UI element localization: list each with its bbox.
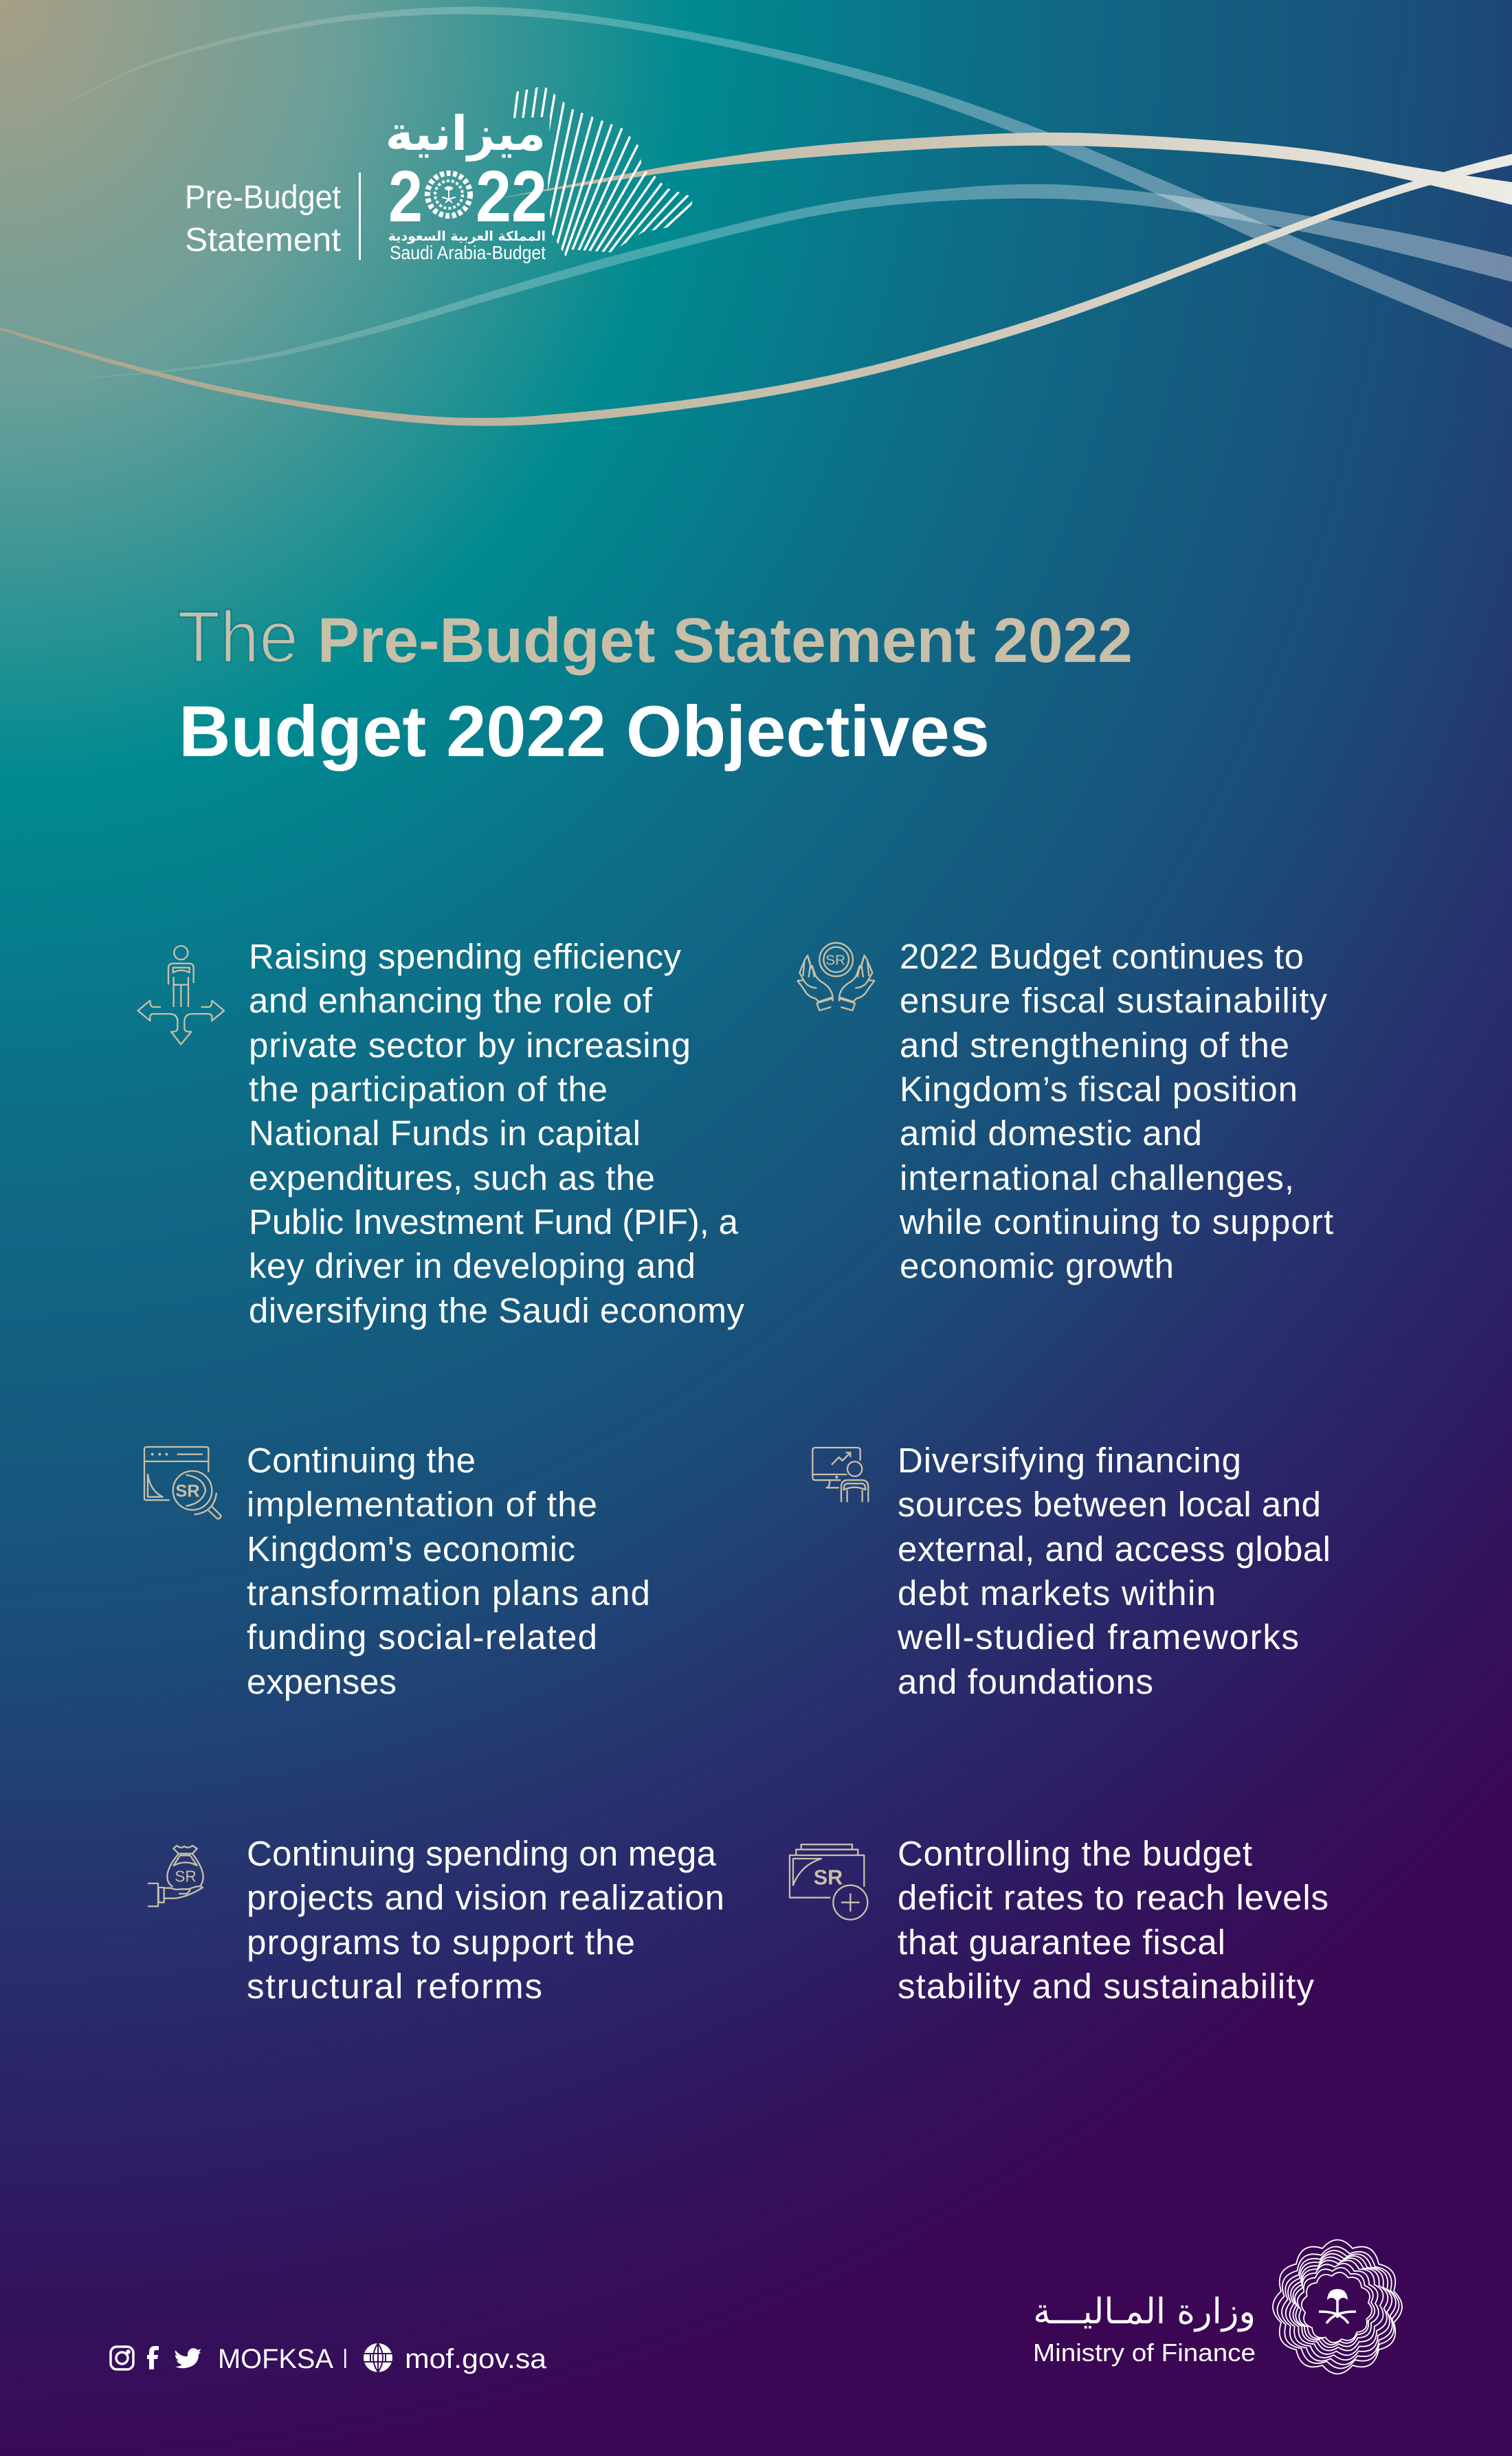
- text: fiscal sustainability: and strengthening of the: [900, 1026, 1289, 1065]
- text: mega projects: structural reforms: [247, 1967, 542, 2006]
- logo: pre-budget statement lockup: 22: [476, 156, 547, 237]
- text: raising spending efficiency: expenditures, such as the: [249, 1158, 655, 1197]
- decorative ribbons: [0, 7, 1512, 426]
- logo: pre-budget statement lockup: [186, 87, 693, 263]
- objective 6: [790, 1834, 1328, 2006]
- icon: hands holding SR coin: SR: [825, 952, 845, 968]
- divider: [359, 173, 361, 260]
- text: diversifying financing: Diversifying financing: [898, 1441, 1241, 1480]
- text: fiscal sustainability: Kingdom’s fiscal position: [900, 1070, 1298, 1109]
- text: mega projects: Continuing spending on mega: [247, 1834, 717, 1873]
- heading line 1: Pre-Budget Statement 2022: [318, 606, 1133, 676]
- icon: facebook: [147, 2346, 159, 2369]
- ribbon: translucent middle wave: [53, 184, 1512, 380]
- text: budget deficit: deficit rates to reach levels: [898, 1878, 1328, 1917]
- text: raising spending efficiency: Public Investment Fund (PIF), a: [249, 1202, 739, 1241]
- icon: hands holding SR coin: [797, 943, 875, 1010]
- text: diversifying financing: external, and access global: [898, 1529, 1331, 1569]
- Arabic wordmark: ميزانية: [386, 107, 546, 162]
- icon: instagram: [111, 2347, 133, 2369]
- English ministry name: Ministry of Finance: [1033, 2338, 1256, 2367]
- objective 2: [797, 937, 1333, 1285]
- text: fiscal sustainability: while continuing to support: [899, 1202, 1333, 1241]
- text: diversifying financing: debt markets within: [898, 1573, 1216, 1613]
- text: transformation plans: Continuing the: [247, 1441, 476, 1480]
- text: mega projects: programs to support the: [247, 1923, 635, 1962]
- icon: banknotes with plus: [790, 1844, 867, 1920]
- label: Pre-Budget Statement: Statement: [185, 222, 341, 258]
- label: Pre-Budget Statement: Pre-Budget: [185, 179, 341, 216]
- text: transformation plans: implementation of the: [247, 1485, 597, 1524]
- text: transformation plans: Kingdom's economic: [247, 1529, 575, 1569]
- emblem: wavy rosette: [1273, 2239, 1402, 2374]
- text: budget deficit: that guarantee fiscal: [898, 1923, 1225, 1962]
- icon: hand holding money bag: SR: [175, 1867, 197, 1885]
- emblem: dotted star with palm: [427, 173, 470, 216]
- text: transformation plans: expenses: [247, 1662, 397, 1701]
- objective 3: [144, 1441, 650, 1701]
- text: diversifying financing: [897, 1441, 1331, 1701]
- objective 4: [812, 1441, 1331, 1701]
- icon: banknotes with plus: SR: [814, 1866, 843, 1890]
- text: fiscal sustainability: [899, 937, 1333, 1285]
- text: raising spending efficiency: key driver in developing and: [249, 1246, 696, 1285]
- Saudi Arabia-Budget: Saudi Arabia-Budget: [390, 242, 546, 263]
- text: fiscal sustainability: 2022 Budget continues to: [900, 937, 1304, 976]
- label: Pre-Budget Statement: [185, 179, 341, 258]
- text: raising spending efficiency: the participation of the: [249, 1070, 608, 1109]
- text: budget deficit: stability and sustainability: [898, 1967, 1314, 2006]
- text: diversifying financing: sources between local and: [898, 1485, 1321, 1524]
- ribbon: tan lower wave: [0, 154, 1512, 426]
- objective 5: [148, 1834, 724, 2006]
- text: budget deficit: [898, 1834, 1328, 2006]
- text: diversifying financing: and foundations: [898, 1662, 1153, 1701]
- heading line 2: Budget 2022 Objectives: [179, 692, 990, 772]
- text: transformation plans: funding social-related: [247, 1617, 597, 1657]
- text: raising spending efficiency: Raising spending efficiency: [249, 937, 682, 976]
- heading line 1: The: [177, 597, 298, 678]
- icon: globe: [364, 2343, 392, 2372]
- icon: twitter: [175, 2348, 201, 2368]
- logo: Ministry of Finance: [1033, 2239, 1402, 2374]
- text: raising spending efficiency: National Funds in capital: [249, 1114, 641, 1153]
- footer: social handles: [111, 2343, 547, 2374]
- map of Saudi Arabia stripes: [513, 87, 693, 256]
- divider: [344, 2349, 346, 2368]
- icon: hand holding money bag: [148, 1846, 203, 1906]
- text: transformation plans: transformation plans and: [247, 1573, 650, 1613]
- text: fiscal sustainability: ensure fiscal sustainability: [900, 981, 1328, 1020]
- text: budget deficit: Controlling the budget: [898, 1834, 1252, 1873]
- icon: person at monitor with chart: [812, 1448, 868, 1502]
- text: raising spending efficiency: [249, 937, 745, 1330]
- text: raising spending efficiency: private sector by increasing: [249, 1026, 691, 1065]
- emblem: palm and swords: [1319, 2289, 1356, 2323]
- text: fiscal sustainability: international challenges,: [900, 1158, 1294, 1197]
- Arabic ministry name: وزارة المـاليـــة: [1033, 2292, 1256, 2332]
- year 2022: 2: [388, 156, 423, 237]
- ribbon: tan upper arc: [500, 133, 1512, 205]
- text: raising spending efficiency: and enhancing the role of: [249, 981, 653, 1020]
- objective 1: [138, 937, 744, 1330]
- text: transformation plans: [247, 1441, 650, 1701]
- text: mega projects: [247, 1834, 724, 2006]
- icon: person at crossroads: [138, 946, 224, 1044]
- text: fiscal sustainability: economic growth: [900, 1246, 1174, 1285]
- icon: browser window with magnifier: [144, 1447, 221, 1519]
- handle: MOFKSA: [218, 2344, 333, 2374]
- ribbon: translucent upper arc: [0, 7, 1512, 349]
- text: mega projects: projects and vision realization: [247, 1878, 724, 1917]
- Arabic country name: المملكة العربية السعودية: [388, 229, 546, 244]
- text: diversifying financing: well-studied frameworks: [897, 1617, 1299, 1657]
- website: mof.gov.sa: [405, 2344, 547, 2374]
- icon: browser window with magnifier: SR: [175, 1481, 200, 1501]
- text: fiscal sustainability: amid domestic and: [900, 1114, 1202, 1153]
- title block: [177, 597, 1133, 772]
- text: raising spending efficiency: diversifying the Saudi economy: [249, 1291, 745, 1330]
